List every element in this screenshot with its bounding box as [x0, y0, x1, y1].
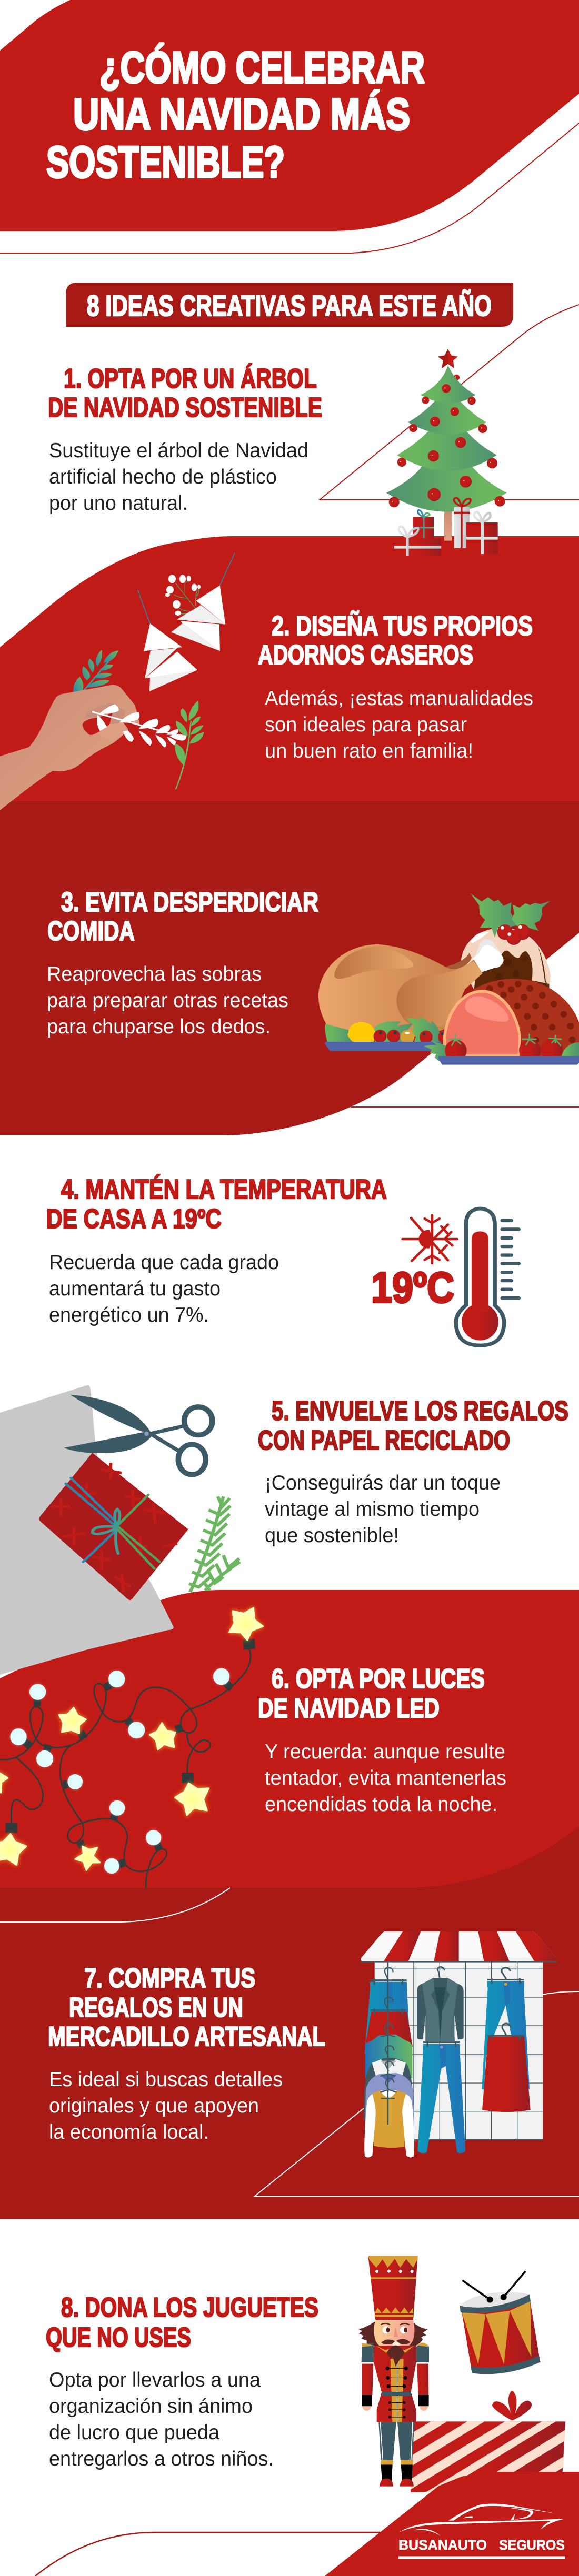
idea 7 text: Es ideal si buscas detalles — [49, 2068, 283, 2091]
idea 1 heading: DE NAVIDAD SOSTENIBLE — [48, 393, 322, 423]
idea 3 text: para chuparse los dedos. — [47, 1015, 271, 1038]
idea 7 heading: MERCADILLO ARTESANAL — [48, 2021, 325, 2052]
idea 5 text: ¡Conseguirás dar un toque — [265, 1472, 501, 1494]
drum — [460, 2271, 541, 2374]
right jeans — [482, 1967, 530, 2090]
idea 2 text: Además, ¡estas manualidades — [265, 687, 533, 710]
illustration: thermometer and snowflake — [371, 1209, 519, 1345]
idea 8 text: entregarlos a otros niños. — [49, 2448, 274, 2470]
idea 8 text — [49, 2369, 274, 2470]
idea 5 heading — [258, 1396, 568, 1456]
idea 1 text: artificial hecho de plástico — [49, 466, 277, 488]
idea 4 text: aumentará tu gasto — [49, 1277, 221, 1300]
panel 3 background — [0, 801, 579, 1135]
idea 5 text — [265, 1472, 501, 1547]
berries — [165, 575, 201, 616]
idea 6 heading — [258, 1664, 485, 1724]
title: SOSTENIBLE? — [46, 137, 285, 187]
idea 2 text — [265, 687, 533, 762]
illustration: scissors — [64, 1395, 212, 1475]
idea 3 text — [47, 963, 288, 1038]
panel 2 background — [0, 536, 579, 801]
center jeans — [417, 2041, 465, 2153]
idea 5 — [0, 1385, 568, 1675]
sockets — [24, 1683, 232, 1865]
logo wordmark: SEGUROS — [499, 2537, 565, 2553]
illustration: christmas tree with gifts — [386, 349, 507, 556]
illustration: fir branch — [189, 1496, 240, 1592]
title — [46, 43, 425, 187]
paper trees — [138, 553, 235, 691]
footer contour line — [35, 2532, 380, 2576]
idea 5 text: que sostenible! — [265, 1524, 399, 1547]
idea 1 text: Sustituye el árbol de Navidad — [49, 439, 308, 462]
white sprig — [97, 704, 170, 748]
gifts — [394, 498, 498, 556]
face — [374, 2320, 414, 2351]
panel 7 upper contour line — [0, 1888, 230, 1922]
idea 4 heading: 4. MANTÉN LA TEMPERATURA — [61, 1174, 387, 1205]
idea 6 text: encendidas toda la noche. — [265, 1793, 497, 1816]
title: ¿CÓMO CELEBRAR — [99, 43, 425, 92]
left stack: mustard top — [364, 2090, 414, 2157]
ham — [443, 979, 579, 1056]
idea 6 text: tentador, evita mantenerlas — [265, 1767, 506, 1789]
section 1 contour line — [320, 305, 579, 500]
idea 7 text: la economía local. — [49, 2121, 209, 2144]
idea 3 heading: 3. EVITA DESPERDICIAR — [61, 887, 318, 918]
logo car — [399, 2504, 565, 2536]
left stack: jeans — [365, 1979, 411, 2054]
body and arms — [362, 2343, 374, 2362]
idea 1 heading — [48, 364, 322, 423]
idea 6 heading: 6. OPTA POR LUCES — [272, 1664, 485, 1694]
idea 3 — [47, 887, 579, 1065]
idea 2 text: un buen rato en familia! — [265, 740, 473, 762]
idea 2 — [0, 553, 533, 810]
footer background — [325, 2472, 579, 2576]
header red contour line — [0, 123, 579, 253]
idea 1 heading: 1. OPTA POR UN ÁRBOL — [64, 364, 317, 394]
cord — [0, 1649, 251, 1888]
left plate food — [325, 1017, 451, 1051]
idea 3 heading: COMIDA — [47, 916, 135, 947]
nutcracker — [358, 2256, 429, 2487]
idea 1 text — [49, 439, 308, 515]
left stack: coloured jacket — [365, 2035, 412, 2078]
idea 3 text: Reaprovecha las sobras — [47, 963, 262, 985]
logo wordmark: BUSANAUTO — [398, 2537, 487, 2553]
ribbon — [66, 1478, 159, 1568]
idea 2 heading: ADORNOS CASEROS — [258, 640, 473, 670]
left stack: lavender cardigan — [365, 2073, 414, 2141]
hand — [0, 685, 139, 810]
idea 7 heading: REGALOS EN UN — [69, 1993, 243, 2023]
idea 7 heading — [48, 1963, 325, 2052]
idea 4 — [46, 1174, 519, 1345]
logo underline — [398, 2556, 565, 2559]
left plate garnish — [325, 1010, 353, 1042]
illustration: thermometer and snowflake: 19ºC — [371, 1264, 454, 1312]
subtitle banner — [66, 283, 513, 327]
idea 4 text: energético un 7%. — [49, 1304, 209, 1326]
idea 7 heading: 7. COMPRA TUS — [84, 1963, 255, 1994]
center jacket — [417, 1967, 464, 2041]
left stack: dark jacket — [364, 2058, 414, 2120]
illustration: hand with paper trees and sprigs — [0, 553, 235, 810]
illustration: grey paper sheet — [0, 1385, 174, 1675]
idea 2 text: son ideales para pasar — [265, 713, 467, 736]
idea 8 text: organización sin ánimo — [49, 2395, 253, 2418]
idea 8 heading — [46, 2292, 318, 2353]
right plate garnish — [424, 1034, 579, 1065]
idea 6 text: Y recuerda: aunque resulte — [265, 1740, 505, 1763]
white bulbs — [10, 1668, 229, 1874]
star bulbs — [0, 1608, 263, 1870]
turkey — [318, 944, 483, 1038]
red skirt — [482, 2024, 531, 2112]
idea 2 heading — [258, 610, 533, 670]
logo — [398, 2504, 565, 2559]
idea 4 heading: DE CASA A 19ºC — [46, 1204, 222, 1234]
panel 7 background — [0, 1815, 579, 2219]
idea 4 text: Recuerda que cada grado — [49, 1251, 279, 1274]
awning — [361, 1931, 557, 1961]
idea 4 text — [49, 1251, 279, 1326]
idea 8 text: Opta por llevarlos a una — [49, 2369, 261, 2391]
panel 3 contour line — [351, 1106, 579, 1108]
idea 5 heading: CON PAPEL RECICLADO — [258, 1425, 510, 1456]
idea 6 — [0, 1608, 506, 1888]
idea 1 — [48, 349, 507, 556]
hair — [358, 2321, 428, 2346]
idea 6 heading: DE NAVIDAD LED — [258, 1693, 440, 1724]
title: UNA NAVIDAD MÁS — [73, 89, 410, 139]
illustration: clothing market stall — [361, 1931, 557, 2157]
legs — [378, 2422, 396, 2460]
logo wordmark — [398, 2537, 565, 2553]
idea 7 text: originales y que apoyen — [49, 2095, 259, 2117]
green sprig — [175, 701, 204, 790]
idea 7 text — [49, 2068, 283, 2144]
illustration: wrapped gift — [39, 1453, 188, 1600]
panel 7 lower contour line — [255, 1991, 579, 2196]
panel 6 background — [0, 1590, 579, 1888]
idea 7 — [48, 1931, 557, 2157]
idea 3 text: para preparar otras recetas — [47, 989, 288, 1012]
idea 5 text: vintage al mismo tiempo — [265, 1498, 480, 1521]
stall wall — [375, 1961, 543, 2140]
idea 1 text: por uno natural. — [49, 492, 188, 515]
idea 8 heading: QUE NO USES — [46, 2322, 191, 2353]
idea 4 heading — [46, 1174, 387, 1234]
left stack: red skirt — [366, 2009, 413, 2047]
idea 8 text: de lucro que pueda — [49, 2421, 219, 2444]
left stack: hangers — [380, 1961, 396, 2125]
idea 8 — [46, 2256, 579, 2518]
idea 3 heading — [47, 887, 318, 947]
header background — [0, 0, 579, 231]
teal sprig — [73, 650, 118, 692]
hat — [368, 2256, 418, 2320]
illustration: led light garland — [0, 1608, 263, 1888]
striped gift box — [273, 2390, 579, 2518]
pudding — [461, 928, 551, 993]
illustration: toys — [358, 2256, 565, 2492]
illustration: christmas food — [318, 893, 579, 1065]
holly and berries — [471, 893, 551, 945]
idea 6 text — [265, 1740, 506, 1816]
idea 8 heading: 8. DONA LOS JUGUETES — [61, 2292, 318, 2323]
